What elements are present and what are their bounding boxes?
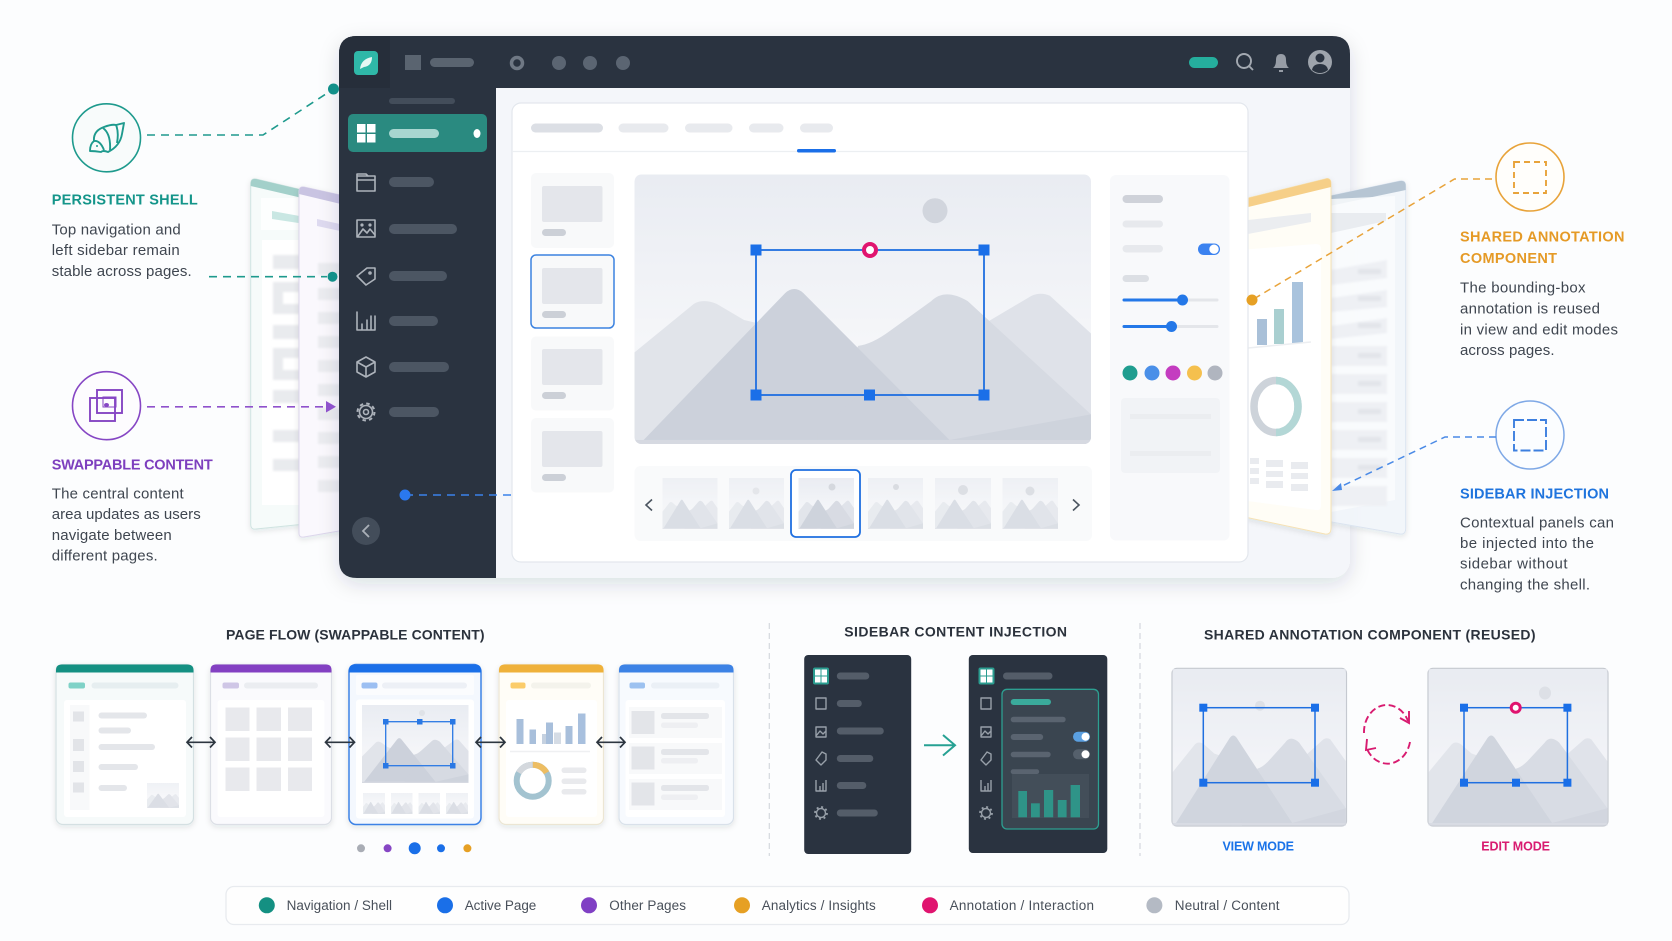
page card: list: [56, 664, 194, 824]
page tabs: [531, 124, 836, 152]
icon: cycle arrows: [1364, 705, 1410, 764]
sidebar: after injection: [969, 655, 1107, 853]
section divider: [768, 623, 770, 856]
page: purple: [299, 187, 345, 537]
icon: image: [357, 220, 375, 237]
body text: [52, 222, 192, 280]
stacked pages behind the shell, left: [251, 179, 345, 537]
icon: bell: [1273, 54, 1289, 72]
callout: sidebar injection: [1332, 401, 1614, 593]
legend item: annotation: Annotation / Interaction: [950, 898, 1094, 913]
bounding box: [750, 244, 990, 400]
donut chart: [517, 765, 549, 797]
body text: The central content: [52, 486, 185, 502]
leader line: [147, 84, 339, 135]
icon: layered pages: [72, 372, 140, 440]
section heading: SHARED ANNOTATION COMPONENT (REUSED): [1204, 626, 1536, 642]
page: teal: [251, 179, 345, 529]
leader line: [1246, 179, 1492, 306]
icon: dashed square: [1496, 143, 1564, 211]
section: page flow: [56, 626, 734, 854]
pagination dots: [357, 842, 471, 854]
icon: folder: [357, 174, 375, 191]
icon: tag: [357, 268, 375, 285]
section divider: [1139, 623, 1141, 856]
legend: [226, 886, 1349, 924]
body text: left sidebar remain: [52, 242, 180, 259]
legend item: other pages: Other Pages: [609, 898, 686, 913]
mini bar chart: [1018, 785, 1080, 817]
legend item: neutral: Neutral / Content: [1175, 898, 1280, 913]
section heading: PAGE FLOW (SWAPPABLE CONTENT): [226, 626, 484, 642]
body text: Top navigation and: [52, 222, 181, 238]
colour swatches: [1122, 366, 1222, 380]
stacked pages behind the content card, right: [1240, 179, 1406, 534]
section: shared annotation component: [1172, 626, 1608, 854]
callout: swappable content: [52, 372, 336, 564]
thumbnail rail: [531, 173, 614, 492]
body text: [52, 486, 201, 564]
app window shell: [339, 36, 1350, 578]
window body: [339, 36, 1350, 578]
body text: changing the shell.: [1460, 576, 1590, 593]
page card: analytics: [499, 664, 604, 824]
leader line: sidebar: [209, 272, 338, 282]
active nav item: [348, 114, 487, 152]
sidebar: before: [804, 655, 911, 854]
page: amber: [1240, 179, 1331, 534]
body text: area updates as users: [52, 506, 201, 523]
heading: SHARED ANNOTATION: [1460, 230, 1624, 246]
content card: [512, 103, 1248, 562]
properties panel: [1110, 175, 1230, 540]
bar chart: [516, 714, 586, 744]
callout: shared annotation component: [1246, 143, 1624, 359]
panel: edit mode: [1428, 668, 1608, 826]
injected panel: [1002, 689, 1098, 829]
heading: SWAPPABLE CONTENT: [52, 458, 213, 474]
leader arrow: [147, 401, 336, 412]
label: view mode: VIEW MODE: [1222, 840, 1294, 854]
icon: search: [1237, 54, 1253, 70]
legend item: analytics: Analytics / Insights: [762, 898, 876, 913]
section: sidebar content injection: [226, 623, 1608, 924]
body text: across pages.: [1460, 342, 1554, 359]
icon: chart: [357, 312, 375, 330]
callout: persistent shell: [52, 84, 339, 282]
heading: SIDEBAR INJECTION: [1460, 486, 1609, 502]
heading: [1460, 230, 1624, 267]
collapse button: [352, 517, 380, 545]
legend item: active page: Active Page: [465, 898, 536, 913]
legend item: active page: [437, 897, 536, 913]
panel: view mode: [1172, 668, 1346, 826]
sliders: [1122, 294, 1218, 332]
legend item: navigation: Navigation / Shell: [287, 898, 392, 913]
page card: active annotation page: [349, 664, 481, 824]
body text: navigate between: [52, 527, 172, 544]
arrow: injection: [924, 735, 955, 756]
double arrows between pages: [187, 737, 625, 748]
body text: [1460, 514, 1614, 593]
body text: in view and edit modes: [1460, 322, 1618, 338]
toggle: [1198, 244, 1220, 255]
body text: different pages.: [52, 548, 158, 564]
body text: annotation is reused: [1460, 300, 1600, 318]
label: edit mode: EDIT MODE: [1481, 840, 1550, 854]
top navigation bar: [339, 36, 1350, 88]
filmstrip: [634, 466, 1092, 541]
icon: avatar: [1308, 50, 1332, 74]
leader: content area: [400, 490, 512, 500]
heading: COMPONENT: [1460, 251, 1557, 267]
legend item: other pages: [581, 897, 686, 913]
page: slate: [1320, 181, 1406, 534]
icon: cube: [357, 357, 375, 377]
heading: PERSISTENT SHELL: [52, 192, 198, 208]
main image with bounding box annotation: [634, 174, 1091, 444]
mini dashboard: [1240, 244, 1321, 510]
icon: shell: [72, 104, 140, 172]
icon: gear: [358, 404, 374, 420]
donut chart: [1254, 380, 1298, 432]
body text: sidebar without: [1460, 556, 1568, 573]
page card: list detail: [619, 664, 734, 824]
section heading: SIDEBAR CONTENT INJECTION: [844, 624, 1067, 640]
icon: dashed panel: [1496, 401, 1564, 469]
body text: be injected into the: [1460, 535, 1594, 552]
leader arrow: [1332, 437, 1496, 491]
body text: stable across pages.: [52, 263, 192, 280]
sidebar navigation items: [348, 98, 487, 545]
left sidebar: [339, 80, 496, 578]
body text: The bounding-box: [1460, 280, 1586, 296]
body text: Contextual panels can: [1460, 514, 1614, 532]
logo: [354, 51, 378, 75]
page card: gallery grid: [210, 664, 332, 824]
body text: [1460, 280, 1618, 359]
